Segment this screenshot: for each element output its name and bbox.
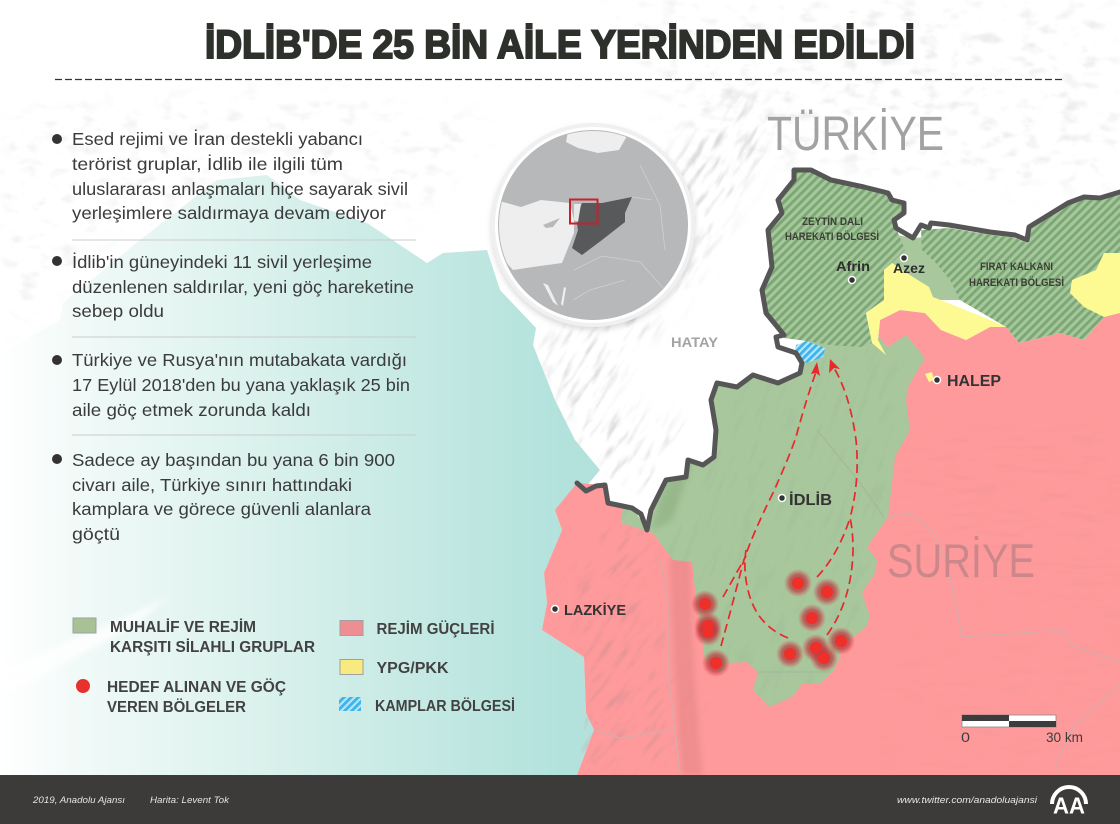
bullet text 3: aile göç etmek zorunda kaldı bbox=[72, 400, 311, 420]
bullet text 3 bbox=[52, 350, 410, 420]
region: Azez corridor bbox=[880, 232, 1030, 300]
label: Hatay: HATAY bbox=[671, 334, 719, 350]
terrain texture: mountains bbox=[540, 97, 777, 489]
icon: AA logo: AA bbox=[1053, 792, 1085, 818]
label: Zeytin Dalı zone bbox=[785, 215, 879, 243]
bullet text 3: 17 Eylül 2018'den bu yana yaklaşık 25 bin bbox=[72, 375, 410, 395]
bullet text 4: civarı aile, Türkiye sınırı hattındaki bbox=[72, 475, 352, 495]
footer bar: www.twitter.com/anadoluajansi bbox=[897, 795, 1038, 806]
bullet text 1 bbox=[52, 129, 408, 223]
terrain on regime region bbox=[575, 490, 1120, 775]
terrain texture: top land bbox=[6, 2, 1118, 299]
legend: targeted areas: HEDEF ALINAN VE GÖÇ bbox=[107, 677, 286, 696]
label: Zeytin Dalı zone: HAREKATI BÖLGESİ bbox=[785, 230, 879, 243]
legend: opposition bbox=[73, 618, 315, 656]
bullet text 2: sebep oldu bbox=[72, 301, 164, 321]
scale bar: 30 km bbox=[1046, 729, 1083, 745]
legend: regime bbox=[340, 619, 494, 638]
bullet text 4: göçtü bbox=[72, 524, 120, 544]
legend: targeted areas bbox=[76, 677, 286, 716]
bullet text 4: kamplara ve görece güvenli alanlara bbox=[72, 499, 371, 519]
city: Lazkiye: LAZKİYE bbox=[564, 602, 626, 619]
city: Idlib: İDLİB bbox=[789, 492, 832, 509]
scale bar bbox=[961, 715, 1083, 745]
title: İDLİB'DE 25 BİN AİLE YERİNDEN EDİLDİ bbox=[205, 23, 915, 67]
region: Zeytin Dalı and Fırat Kalkanı hatched zones bbox=[762, 170, 1120, 347]
label: Zeytin Dalı zone: ZEYTİN DALI bbox=[802, 215, 863, 228]
label: Fırat Kalkanı zone bbox=[969, 261, 1064, 289]
region: camps bbox=[794, 341, 825, 363]
footer bar: 2019, Anadolu Ajansı bbox=[32, 795, 125, 806]
bullet text 3: Türkiye ve Rusya'nın mutabakata vardığı bbox=[72, 350, 407, 370]
targeted area markers bbox=[691, 569, 855, 677]
bullet text 4 bbox=[52, 450, 395, 544]
bullet text 4: Sadece ay başından bu yana 6 bin 900 bbox=[72, 450, 395, 470]
bullet text 1: yerleşimlere saldırmaya devam ediyor bbox=[72, 203, 386, 223]
label: Fırat Kalkanı zone: FIRAT KALKANI bbox=[980, 261, 1053, 273]
border line bbox=[577, 170, 1120, 530]
sea bbox=[0, 175, 600, 775]
legend: regime: REJİM GÜÇLERİ bbox=[376, 619, 494, 638]
Cyprus strip bbox=[0, 596, 170, 692]
bullet text 2: düzenlenen saldırılar, yeni göç hareketine bbox=[72, 277, 414, 297]
legend: camps: KAMPLAR BÖLGESİ bbox=[375, 696, 515, 715]
label: Türkiye: TÜRKİYE bbox=[767, 108, 944, 161]
inset locator globe bbox=[480, 120, 695, 330]
region: YPG/PKK bbox=[866, 253, 1120, 382]
legend: opposition: MUHALİF VE REJİM bbox=[110, 618, 256, 636]
region: opposition groups Idlib bbox=[621, 335, 925, 707]
city: Halep: HALEP bbox=[947, 373, 1001, 390]
city: Azez: Azez bbox=[893, 260, 925, 276]
legend: targeted areas: VEREN BÖLGELER bbox=[107, 697, 246, 716]
region: regime forces bbox=[542, 310, 1120, 775]
scale bar: 0 bbox=[961, 729, 970, 745]
footer bar bbox=[0, 775, 1120, 824]
legend: YPG/PKK: YPG/PKK bbox=[376, 660, 449, 677]
city: Afrin: Afrin bbox=[836, 258, 870, 274]
displacement arrows bbox=[721, 359, 857, 646]
label: Suriye: SURİYE bbox=[887, 534, 1035, 587]
bullet text 1: terörist gruplar, İdlib ile ilgili tüm bbox=[72, 154, 343, 174]
bullet text 1: uluslararası anlaşmaları hiçe sayarak sivil bbox=[72, 179, 408, 199]
bullet text 2: İdlib'in güneyindeki 11 sivil yerleşime bbox=[72, 252, 372, 272]
legend: YPG/PKK bbox=[340, 660, 449, 677]
bullet text 1: Esed rejimi ve İran destekli yabancı bbox=[72, 129, 363, 149]
footer bar: Harita: Levent Tok bbox=[150, 795, 230, 806]
legend: camps bbox=[339, 696, 515, 715]
label: Fırat Kalkanı zone: HAREKATI BÖLGESİ bbox=[969, 276, 1064, 289]
city: Afrin bbox=[836, 258, 870, 284]
bullet text 2 bbox=[52, 252, 414, 321]
legend: opposition: KARŞITI SİLAHLI GRUPLAR bbox=[110, 638, 315, 656]
